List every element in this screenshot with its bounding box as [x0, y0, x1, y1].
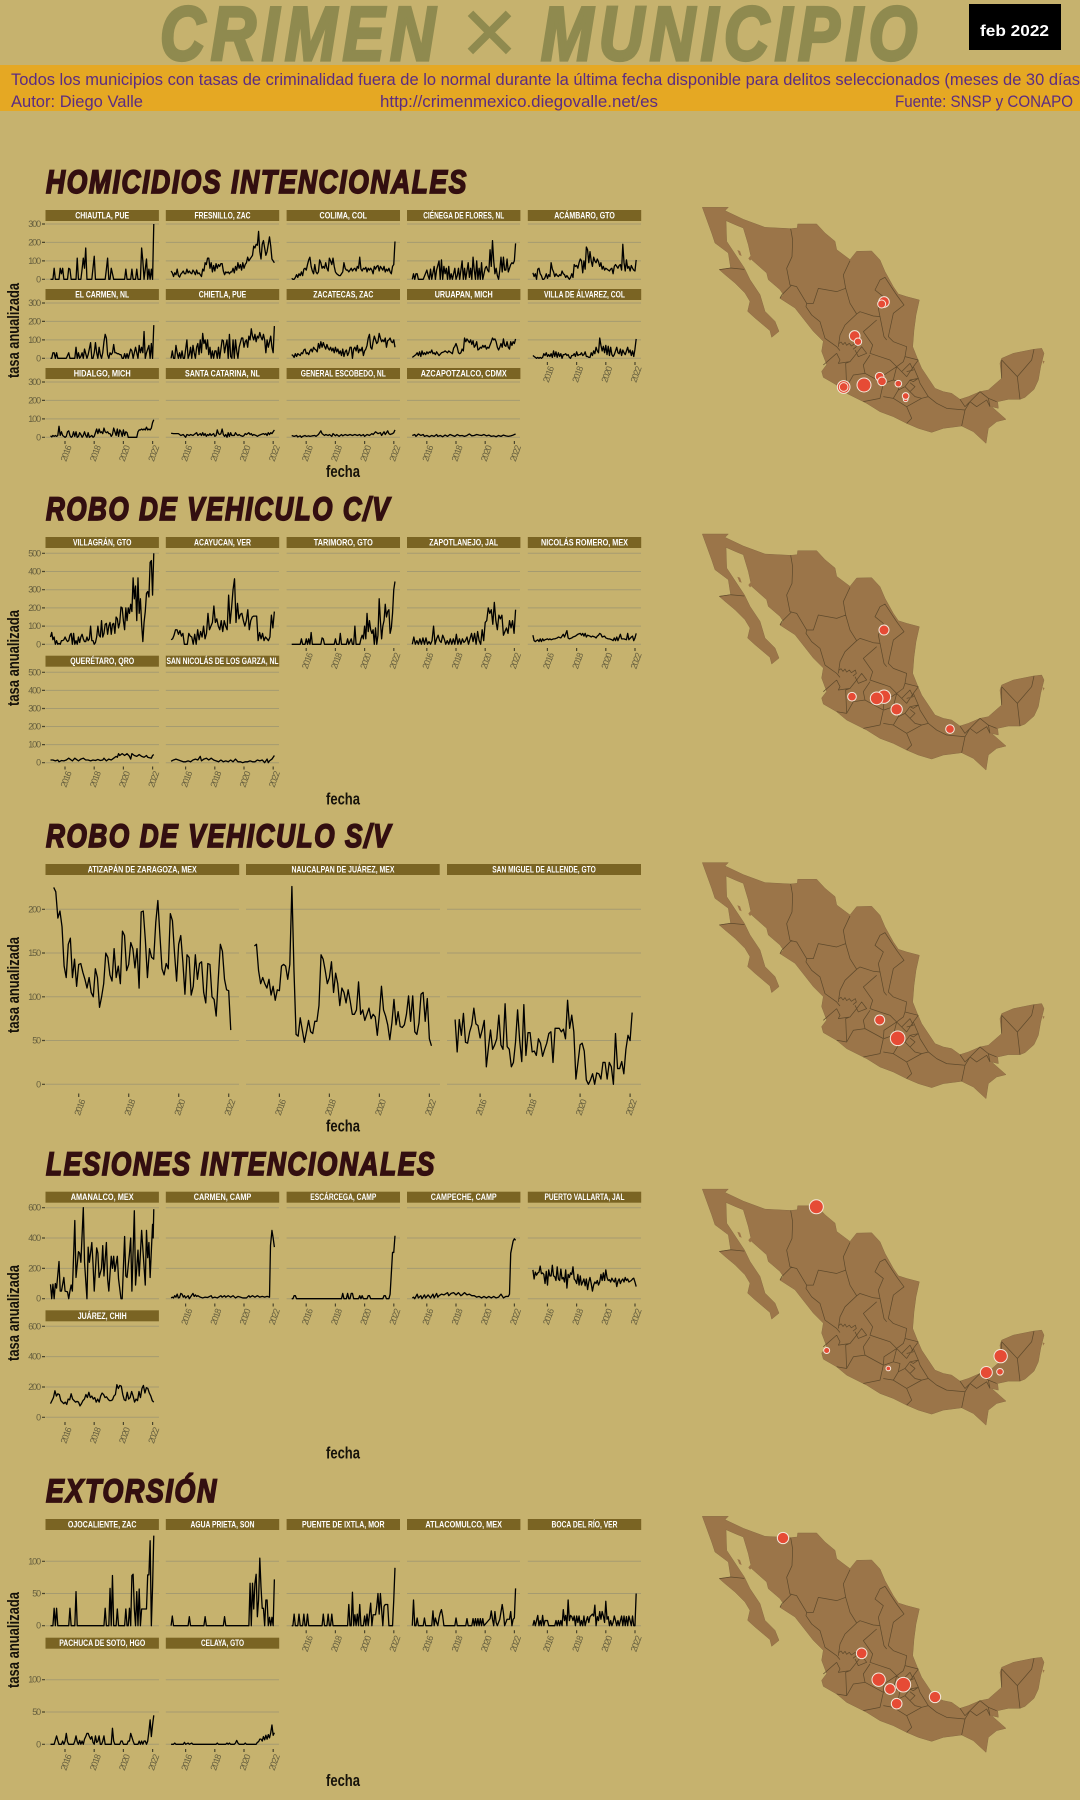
chart: Acayucan — [166, 537, 279, 644]
chart: Atlacomulco: 2016 — [420, 1634, 436, 1653]
chart: Azcapotzalco: 2018 — [450, 444, 465, 463]
chart: Boca del Rio: 2020 — [599, 1634, 615, 1653]
y axis label: tasa anualizada — [4, 283, 23, 378]
chart: Carmen: 2022 — [267, 1307, 282, 1326]
chart: Naucalpan de Juarez: NAUCALPAN DE JUÁREZ, MEX — [292, 864, 394, 874]
chart: Hidalgo: 200 — [28, 395, 41, 405]
x axis label: fecha — [326, 462, 360, 481]
chart: El Carmen: 300 — [28, 298, 41, 308]
chart: Puente de Ixtla: 2020 — [358, 1634, 373, 1653]
chart: Celaya: 2018 — [208, 1753, 224, 1772]
chart: Chietla — [166, 289, 279, 358]
chart: Pachuca de Soto: 50 — [32, 1707, 41, 1717]
chart: Chiautla: CHIAUTLA, PUE — [75, 210, 129, 220]
chart: Santa Catarina: 2018 — [208, 444, 224, 463]
chart: Acambaro: ACÁMBARO, GTO — [554, 210, 615, 220]
chart: Celaya: 2022 — [267, 1753, 282, 1772]
chart: Chiautla — [28, 210, 159, 284]
chart: Naucalpan de Juarez — [246, 864, 440, 1117]
chart: Puerto Vallarta: 2022 — [629, 1307, 644, 1326]
chart: Santa Catarina: 2020 — [238, 444, 253, 463]
chart: Juarez: 2018 — [88, 1426, 103, 1445]
chart: General Escobedo: GENERAL ESCOBEDO, NL — [301, 368, 386, 378]
chart: Pachuca de Soto — [28, 1638, 161, 1772]
chart: Atizapan de Zaragoza: 2020 — [172, 1098, 187, 1117]
chart: Agua Prieta — [166, 1519, 279, 1626]
subtitle band — [0, 65, 1080, 111]
chart: Villagran: VILLAGRÁN, GTO — [73, 538, 131, 548]
chart: Uruapan — [407, 289, 520, 358]
map: lesiones — [702, 1189, 1045, 1425]
chart: Celaya: CELAYA, GTO — [201, 1638, 244, 1648]
panel: homicidios intencionales — [4, 164, 644, 481]
chart: Hidalgo: 100 — [28, 414, 41, 424]
chart: Pachuca de Soto: 0 — [36, 1739, 41, 1749]
chart: Puente de Ixtla: 2016 — [300, 1634, 315, 1653]
chart: Juarez: 2016 — [59, 1426, 74, 1445]
y axis label: tasa anualizada — [4, 610, 23, 706]
heading: LESIONES INTENCIONALES — [46, 1146, 436, 1182]
title — [160, 0, 923, 85]
chart: Juarez — [28, 1310, 161, 1445]
chart: Ojocaliente: 0 — [36, 1621, 41, 1631]
heading: EXTORSIÓN — [46, 1473, 218, 1509]
chart: Tarimoro: 2022 — [387, 651, 403, 670]
chart: Naucalpan de Juarez: 2022 — [423, 1098, 438, 1117]
chart: Atlacomulco — [407, 1519, 523, 1653]
date badge: feb 2022 — [980, 23, 1049, 40]
chart: Fresnillo — [166, 210, 279, 279]
chart: Atizapan de Zaragoza: 2016 — [72, 1098, 87, 1117]
chart: Puente de Ixtla: 2018 — [329, 1634, 344, 1653]
chart: Pachuca de Soto: 2022 — [146, 1753, 161, 1772]
chart: Zapotlanejo: 2018 — [450, 651, 465, 670]
chart: Chiautla: 0 — [36, 274, 41, 284]
chart: Villagran: 100 — [28, 621, 41, 631]
chart: Chiautla: 200 — [28, 237, 41, 247]
chart: Villagran: 400 — [28, 566, 41, 576]
chart: Puerto Vallarta — [528, 1192, 644, 1326]
chart: Celaya — [166, 1638, 282, 1772]
chart: Nicolas Romero: 2020 — [599, 651, 615, 670]
chart: Naucalpan de Juarez: 2016 — [273, 1098, 288, 1117]
chart: Escarcega: 2016 — [300, 1307, 315, 1326]
chart: Atizapan de Zaragoza: 2018 — [122, 1098, 137, 1117]
chart: Nicolas Romero: 2016 — [541, 651, 556, 670]
chart: San Nicolas de los Garza: 2020 — [238, 770, 253, 789]
chart: San Miguel de Allende: 2020 — [574, 1098, 589, 1117]
chart: Santa Catarina: 2022 — [267, 444, 282, 463]
chart: Puerto Vallarta: 2018 — [570, 1307, 585, 1326]
chart: Hidalgo: 0 — [36, 432, 41, 442]
chart: Villa de Alvarez — [528, 289, 644, 384]
chart: Escarcega: 2022 — [387, 1307, 403, 1326]
chart: Juarez: 2020 — [117, 1426, 132, 1445]
chart: Campeche — [407, 1192, 523, 1326]
chart: General Escobedo: 2020 — [358, 444, 373, 463]
chart: Santa Catarina — [166, 368, 282, 463]
chart: Tarimoro: 2020 — [358, 651, 373, 670]
panel: robo de vehiculo con violencia — [4, 491, 644, 808]
chart: Atlacomulco: 2022 — [508, 1634, 523, 1653]
chart: Santa Catarina: 2016 — [179, 444, 194, 463]
chart: Escarcega — [287, 1192, 403, 1326]
y axis label: tasa anualizada — [4, 1592, 23, 1688]
date badge — [969, 4, 1061, 50]
chart: Escarcega: 2020 — [358, 1307, 373, 1326]
chart: San Nicolas de los Garza: 2016 — [179, 770, 194, 789]
chart: San Nicolas de los Garza — [166, 656, 282, 789]
x axis label: fecha — [326, 1116, 360, 1136]
chart: Hidalgo: 2016 — [59, 444, 74, 463]
chart: Villagran: 500 — [28, 548, 41, 558]
chart: Azcapotzalco — [407, 368, 523, 463]
chart: Queretaro: 2016 — [59, 770, 74, 789]
chart: Atlacomulco: 2020 — [479, 1634, 494, 1653]
chart: Escarcega: 2018 — [329, 1307, 344, 1326]
chart: Atizapan de Zaragoza — [28, 864, 239, 1117]
chart: Chiautla: 300 — [28, 219, 41, 229]
chart: San Nicolas de los Garza: 2018 — [208, 770, 224, 789]
chart: Villa de Alvarez: VILLA DE ÁLVAREZ, COL — [544, 290, 625, 300]
chart: Villagran: 200 — [28, 603, 41, 613]
chart: Zapotlanejo: 2022 — [508, 651, 523, 670]
chart: Hidalgo: 2018 — [88, 444, 103, 463]
chart: Queretaro: 2022 — [146, 770, 161, 789]
chart: San Nicolas de los Garza: 2022 — [267, 770, 282, 789]
chart: Campeche: CAMPECHE, CAMP — [431, 1192, 497, 1202]
chart: Azcapotzalco: AZCAPOTZALCO, CDMX — [421, 368, 507, 378]
chart: Atlacomulco: 2018 — [450, 1634, 465, 1653]
chart: Atizapan de Zaragoza: 2022 — [222, 1098, 237, 1117]
chart: General Escobedo: 2018 — [329, 444, 344, 463]
chart: Queretaro: QUERÉTARO, QRO — [70, 656, 134, 666]
chart: San Miguel de Allende — [447, 864, 641, 1117]
chart: Campeche: 2018 — [450, 1307, 465, 1326]
chart: Chietla: CHIETLA, PUE — [199, 290, 246, 300]
chart: Zacatecas — [287, 289, 400, 358]
chart: Ojocaliente: 50 — [32, 1588, 41, 1598]
chart: El Carmen: EL CARMEN, NL — [75, 290, 130, 300]
chart: Uruapan: URUAPAN, MICH — [435, 290, 493, 300]
chart: Juarez: 2022 — [146, 1426, 161, 1445]
chart: Villagran — [28, 537, 159, 649]
chart: Acambaro — [528, 210, 641, 279]
heading: HOMICIDIOS INTENCIONALES — [46, 164, 468, 200]
map: extorsion — [702, 1516, 1045, 1752]
chart: Puerto Vallarta: 2020 — [599, 1307, 615, 1326]
chart: Hidalgo: HIDALGO, MICH — [74, 368, 131, 378]
map: homicidios — [702, 207, 1045, 443]
chart: Puente de Ixtla — [287, 1519, 403, 1653]
chart: Villagran: 300 — [28, 585, 41, 595]
chart: Queretaro: 200 — [28, 722, 41, 732]
x axis label: fecha — [326, 790, 360, 808]
chart: Hidalgo: 2020 — [117, 444, 132, 463]
chart: Atizapan de Zaragoza: 200 — [28, 904, 41, 914]
chart: El Carmen: 0 — [36, 353, 41, 363]
chart: Zapotlanejo: ZAPOTLANEJO, JAL — [429, 538, 499, 548]
chart: Pachuca de Soto: 100 — [28, 1675, 41, 1685]
chart: Pachuca de Soto: 2016 — [59, 1753, 74, 1772]
chart: Naucalpan de Juarez: 2020 — [373, 1098, 388, 1117]
chart: Campeche: 2016 — [420, 1307, 436, 1326]
chart: Zapotlanejo — [407, 537, 523, 670]
chart: El Carmen: 200 — [28, 316, 41, 326]
chart: Juarez: 600 — [28, 1321, 41, 1331]
subtitle band: http://crimenmexico.diegovalle.net/es — [380, 92, 658, 111]
chart: Campeche: 2022 — [508, 1307, 523, 1326]
chart: Queretaro: 400 — [28, 685, 41, 695]
chart: Celaya: 2016 — [179, 1753, 194, 1772]
chart: Tarimoro: TARIMORO, GTO — [314, 538, 373, 548]
chart: Puerto Vallarta: 2016 — [541, 1307, 556, 1326]
chart: Atizapan de Zaragoza: 100 — [28, 992, 41, 1002]
chart: San Nicolas de los Garza: SAN NICOLÁS DE LOS GARZA, NL — [166, 656, 279, 666]
panel: robo de vehiculo sin violencia — [4, 818, 641, 1136]
chart: Atizapan de Zaragoza: 0 — [36, 1079, 41, 1089]
chart: Chiautla: 100 — [28, 256, 41, 266]
chart: Villagran: 0 — [36, 639, 41, 649]
chart: Juarez: 0 — [36, 1412, 41, 1422]
chart: Boca del Rio: 2016 — [541, 1634, 556, 1653]
chart: Juarez: JUÁREZ, CHIH — [78, 1311, 127, 1321]
chart: El Carmen: 100 — [28, 335, 41, 345]
chart: El Carmen — [28, 289, 159, 363]
x axis label: fecha — [326, 1771, 360, 1790]
chart: Azcapotzalco: 2022 — [508, 444, 523, 463]
map: robo con violencia — [702, 534, 1045, 770]
chart: Villa de Alvarez: 2022 — [629, 365, 644, 384]
y axis label: tasa anualizada — [4, 1265, 23, 1361]
chart: Puerto Vallarta: PUERTO VALLARTA, JAL — [544, 1192, 625, 1202]
chart: Campeche: 2020 — [479, 1307, 494, 1326]
chart: Amanalco: 400 — [28, 1233, 41, 1243]
chart: Queretaro: 0 — [36, 758, 41, 768]
chart: Amanalco: 0 — [36, 1294, 41, 1304]
chart: Ojocaliente: 100 — [28, 1556, 41, 1566]
chart: Tarimoro — [287, 537, 403, 670]
chart: Atizapan de Zaragoza: 50 — [32, 1036, 41, 1046]
chart: Naucalpan de Juarez: 2018 — [323, 1098, 338, 1117]
chart: Celaya: 2020 — [238, 1753, 253, 1772]
chart: San Miguel de Allende: SAN MIGUEL DE ALLENDE, GTO — [492, 864, 596, 874]
chart: Queretaro: 2020 — [117, 770, 132, 789]
chart: Acayucan: ACAYUCAN, VER — [194, 538, 251, 548]
chart: Carmen: CARMEN, CAMP — [194, 1192, 251, 1202]
chart: Zapotlanejo: 2016 — [420, 651, 436, 670]
chart: Nicolas Romero: 2022 — [629, 651, 644, 670]
chart: Queretaro: 2018 — [88, 770, 103, 789]
chart: Nicolas Romero: NICOLÁS ROMERO, MEX — [541, 538, 628, 548]
chart: Boca del Rio — [528, 1519, 644, 1653]
chart: Hidalgo: 2022 — [146, 444, 161, 463]
chart: Queretaro: 300 — [28, 704, 41, 714]
chart: Agua Prieta: AGUA PRIETA, SON — [190, 1520, 254, 1530]
chart: Queretaro — [28, 656, 161, 789]
chart: Azcapotzalco: 2020 — [479, 444, 494, 463]
chart: Nicolas Romero — [528, 537, 644, 670]
chart: Queretaro: 100 — [28, 740, 41, 750]
chart: Ojocaliente: OJOCALIENTE, ZAC — [68, 1520, 137, 1530]
chart: Juarez: 200 — [28, 1382, 41, 1392]
chart: San Miguel de Allende: 2018 — [524, 1098, 539, 1117]
chart: Boca del Rio: 2022 — [629, 1634, 644, 1653]
chart: Boca del Rio: 2018 — [570, 1634, 585, 1653]
chart: Puente de Ixtla: PUENTE DE IXTLA, MOR — [302, 1520, 385, 1530]
subtitle band: Autor: Diego Valle — [11, 92, 143, 111]
x axis label: fecha — [326, 1444, 360, 1462]
chart: General Escobedo: 2022 — [387, 444, 403, 463]
chart: Pachuca de Soto: 2018 — [88, 1753, 103, 1772]
chart: Pachuca de Soto: PACHUCA DE SOTO, HGO — [59, 1638, 145, 1648]
chart: Atizapan de Zaragoza: 150 — [28, 948, 41, 958]
chart: Cienega de Flores: CIÉNEGA DE FLORES, NL — [423, 210, 505, 220]
chart: Carmen — [166, 1192, 282, 1326]
chart: Atlacomulco: ATLACOMULCO, MEX — [425, 1520, 502, 1530]
chart: Puente de Ixtla: 2022 — [387, 1634, 403, 1653]
chart: Hidalgo: 300 — [28, 377, 41, 387]
chart: Amanalco: AMANALCO, MEX — [71, 1192, 134, 1202]
chart: Amanalco: 200 — [28, 1263, 41, 1273]
map: robo sin violencia — [702, 863, 1045, 1099]
chart: Tarimoro: 2018 — [329, 651, 344, 670]
chart: Tarimoro: 2016 — [300, 651, 315, 670]
chart: Amanalco — [28, 1192, 159, 1304]
chart: Azcapotzalco: 2016 — [420, 444, 436, 463]
chart: San Miguel de Allende: 2022 — [624, 1098, 639, 1117]
chart: General Escobedo — [287, 368, 403, 463]
chart: Fresnillo: FRESNILLO, ZAC — [194, 210, 251, 220]
chart: Escarcega: ESCÁRCEGA, CAMP — [310, 1192, 376, 1202]
chart: Santa Catarina: SANTA CATARINA, NL — [185, 368, 260, 378]
chart: Cienega de Flores — [407, 210, 520, 279]
chart: Nicolas Romero: 2018 — [570, 651, 585, 670]
chart: Boca del Rio: BOCA DEL RÍO, VER — [552, 1520, 618, 1530]
chart: Juarez: 400 — [28, 1352, 41, 1362]
chart: Villa de Alvarez: 2020 — [599, 365, 615, 384]
chart: Colima: COLIMA, COL — [320, 210, 367, 220]
chart: Queretaro: 500 — [28, 667, 41, 677]
panel: lesiones intencionales — [4, 1146, 644, 1462]
chart: Villa de Alvarez: 2018 — [570, 365, 585, 384]
chart: Pachuca de Soto: 2020 — [117, 1753, 132, 1772]
chart: Carmen: 2016 — [179, 1307, 194, 1326]
chart: Atizapan de Zaragoza: ATIZAPÁN DE ZARAGOZA, MEX — [88, 864, 197, 874]
chart: General Escobedo: 2016 — [300, 444, 315, 463]
panel: extorsion — [4, 1473, 644, 1790]
chart: Carmen: 2018 — [208, 1307, 224, 1326]
chart: Hidalgo — [28, 368, 161, 463]
y axis label: tasa anualizada — [4, 937, 23, 1033]
heading: ROBO DE VEHICULO C/V — [46, 491, 392, 527]
chart: Zacatecas: ZACATECAS, ZAC — [313, 290, 374, 300]
chart: Colima — [287, 210, 400, 279]
chart: Zapotlanejo: 2020 — [479, 651, 494, 670]
chart: Carmen: 2020 — [238, 1307, 253, 1326]
chart: Amanalco: 600 — [28, 1203, 41, 1213]
chart: Ojocaliente — [28, 1519, 159, 1631]
chart: Villa de Alvarez: 2016 — [541, 365, 556, 384]
chart: San Miguel de Allende: 2016 — [474, 1098, 489, 1117]
heading: ROBO DE VEHICULO S/V — [46, 818, 393, 854]
